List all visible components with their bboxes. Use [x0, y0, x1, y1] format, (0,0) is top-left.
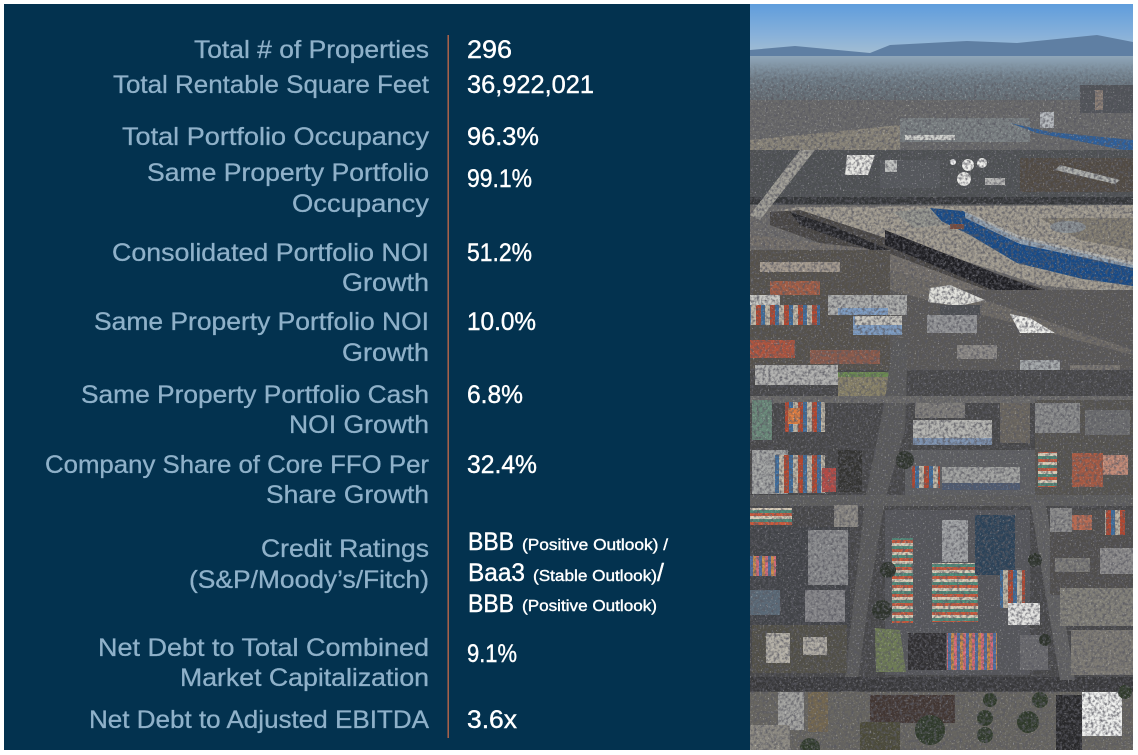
- row: total properties: [194, 36, 512, 64]
- row: same property cash NOI growth: 6.8%: [467, 381, 523, 409]
- row: credit ratings: (Positive Outlook) /: [522, 537, 669, 554]
- panel: key statistics background: [4, 4, 750, 750]
- lower ground base: [750, 370, 1133, 692]
- row: net debt to market cap: [98, 634, 517, 692]
- bottom blocks and trees: [750, 692, 1133, 750]
- row: credit ratings: /: [657, 559, 664, 587]
- row: same property cash NOI growth: [81, 381, 523, 439]
- row: net debt to market cap: Net Debt to Total Combined: [98, 634, 429, 662]
- row: credit ratings: (S&P/Moody’s/Fitch): [189, 566, 429, 594]
- container yards left: [752, 400, 772, 440]
- row: credit ratings: (Stable Outlook): [533, 568, 657, 585]
- row: same property NOI growth: [94, 308, 536, 367]
- row: total properties: 296: [467, 36, 512, 64]
- row: total occupancy: Total Portfolio Occupancy: [122, 123, 430, 151]
- row: same property NOI growth: 10.0%: [467, 308, 536, 336]
- row: same property occupancy: 99.1%: [467, 165, 532, 193]
- central container yard: [885, 510, 1030, 675]
- row: same property cash NOI growth: NOI Growth: [289, 411, 429, 439]
- image grain: [750, 62, 1133, 752]
- row: core FFO growth: Company Share of Core FFO Per: [45, 451, 429, 479]
- row: consolidated NOI growth: Consolidated Portfolio NOI: [112, 239, 429, 267]
- upper industrial lots: [750, 250, 890, 370]
- row: credit ratings: Baa3: [468, 559, 525, 587]
- row: consolidated NOI growth: [112, 239, 532, 297]
- row: same property NOI growth: Growth: [342, 339, 429, 367]
- row: total occupancy: 96.3%: [467, 123, 539, 151]
- row: net debt to market cap: Market Capitalization: [180, 664, 429, 692]
- row: core FFO growth: 32.4%: [467, 451, 537, 479]
- roads: [842, 364, 907, 692]
- row: core FFO growth: Share Growth: [266, 481, 429, 509]
- row: same property occupancy: Same Property Portfolio: [147, 159, 429, 187]
- row: net debt to market cap: 9.1%: [467, 640, 517, 668]
- row: total properties: Total # of Properties: [194, 36, 429, 64]
- row: net debt to EBITDA: 3.6x: [467, 706, 518, 734]
- row: credit ratings: [189, 528, 669, 618]
- row: same property NOI growth: Same Property Portfolio NOI: [94, 308, 429, 336]
- rail yard: [770, 210, 1046, 290]
- row: same property occupancy: [147, 159, 532, 218]
- row: core FFO growth: [45, 451, 537, 509]
- row: total occupancy: [122, 123, 539, 151]
- row: rentable square feet: Total Rentable Square Feet: [113, 71, 429, 99]
- row: credit ratings: Credit Ratings: [261, 535, 429, 563]
- row: rentable square feet: [113, 71, 594, 99]
- row: consolidated NOI growth: Growth: [342, 269, 429, 297]
- divider line: [448, 35, 449, 738]
- row: credit ratings: BBB: [468, 590, 514, 618]
- open ground and channel: [780, 205, 1133, 295]
- refinery: [750, 150, 1133, 205]
- row: credit ratings: (Positive Outlook): [522, 598, 657, 615]
- row: consolidated NOI growth: 51.2%: [467, 239, 532, 267]
- row: same property occupancy: Occupancy: [292, 190, 430, 218]
- row: credit ratings: BBB: [468, 528, 514, 556]
- photo: aerial view of industrial port district: [750, 4, 1133, 755]
- row: same property cash NOI growth: Same Property Portfolio Cash: [81, 381, 429, 409]
- warehouses centre: [913, 420, 992, 438]
- container yards right: [1035, 400, 1133, 495]
- row: net debt to EBITDA: Net Debt to Adjusted EBITDA: [89, 706, 429, 734]
- row: rentable square feet: 36,922,021: [467, 71, 594, 99]
